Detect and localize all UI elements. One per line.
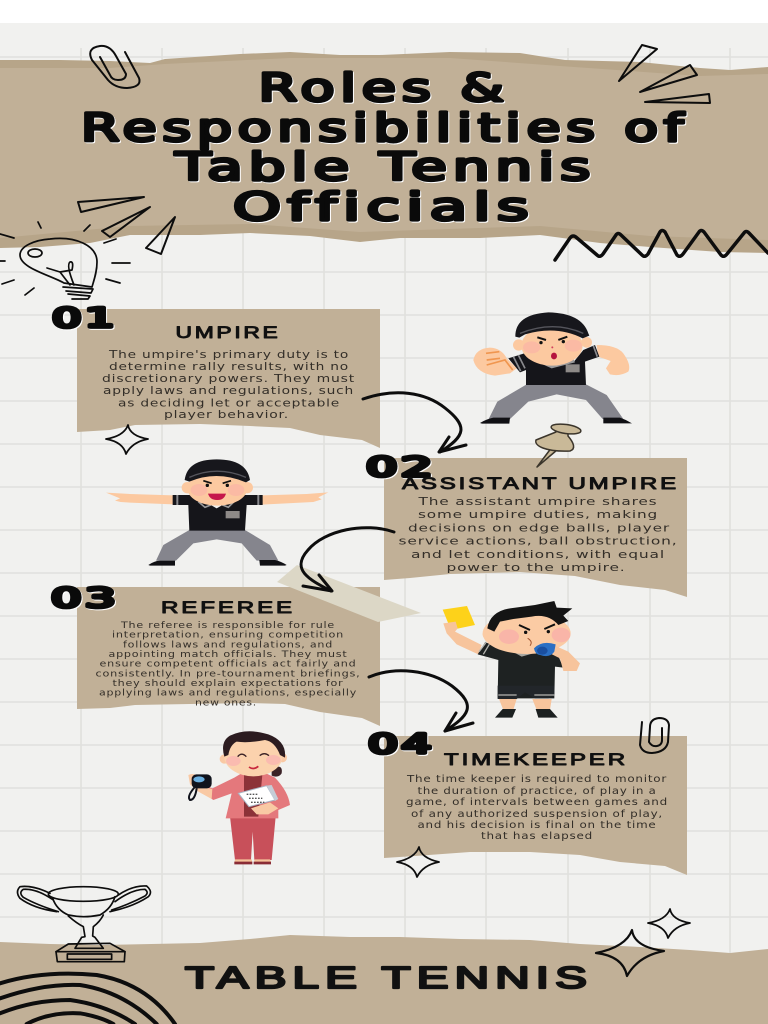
panel: referee [51,583,380,726]
illustration: assistant umpire arms out [106,459,328,566]
timekeeper description: of any authorized suspension of play, [411,809,663,820]
panel: timekeeper [368,729,687,875]
icon: light bulb [0,222,130,299]
referee description: follows laws and regulations, and [123,640,333,650]
icon: spikes top left [78,197,175,254]
title: Roles & [258,66,510,110]
icon: large sparkle [596,930,664,976]
referee description: they should explain expectations for [112,679,344,689]
panel: assistant umpire [366,452,687,597]
tape strip [277,565,421,622]
umpire description: as deciding let or acceptable [118,398,340,410]
umpire description: player behavior. [164,409,289,421]
referee description: interpretation, ensuring competition [112,631,344,641]
icon: push pin [536,422,581,467]
umpire description: apply laws and regulations, such [103,385,354,397]
referee description [96,621,360,708]
arrow: referee to timekeeper [369,671,473,731]
referee description: The referee is responsible for rule [120,621,335,631]
assistant umpire description: and let conditions, with equal [411,548,665,561]
arrow: assistant umpire to referee [301,528,394,591]
timekeeper description: and his decision is final on the time [418,820,656,831]
icon: concentric arcs [0,974,175,1024]
assistant umpire description: decisions on edge balls, player [408,522,670,534]
referee description: appointing match officials. They must [108,650,348,660]
timekeeper description: the duration of practice, of play in a [418,786,656,797]
timekeeper description: that has elapsed [481,831,593,842]
icon: paperclip top [90,46,140,88]
umpire description: discretionary powers. They must [102,373,355,385]
heading: umpire: UMPIRE [176,323,280,342]
number 03: 03 [51,583,119,614]
icon: zigzag line [555,230,768,260]
number 02: 02 [366,452,436,483]
number 04: 04 [368,729,435,760]
assistant umpire description: service actions, ball obstruction, [398,534,678,548]
panel: title banner torn paper [0,52,768,253]
referee description: consistently. In pre-tournament briefings, [96,669,360,679]
icon: sparkle beside timekeeper panel [397,847,439,877]
illustration: umpire pointing fist [473,312,632,424]
assistant umpire description: power to the umpire. [446,561,626,574]
umpire description: The umpire's primary duty is to [108,349,349,361]
title: Officials [233,185,535,229]
illustration: timekeeper with stopwatch and notebook [188,731,290,864]
heading: assistant umpire: ASSISTANT UMPIRE [402,474,679,493]
assistant umpire description: some umpire duties, making [418,508,658,521]
timekeeper description: game, of intervals between games and [406,797,668,808]
icon: paperclip timekeeper [640,718,669,753]
heading: referee: REFEREE [161,598,295,617]
panel: umpire [52,303,380,448]
heading: timekeeper: TIMEKEEPER [444,750,628,769]
number 01: 01 [52,303,118,334]
referee description: ensure competent officials act fairly and [100,660,356,670]
umpire description [102,349,355,421]
title [81,66,689,229]
icon: spikes top right [619,45,710,103]
illustration: referee with yellow card and whistle [443,601,580,718]
icon: small sparkle [648,909,690,938]
referee description: new ones. [195,698,257,708]
arrow: umpire to assistant umpire [363,393,466,452]
umpire description: determine rally results, with no [109,361,349,373]
icon: sparkle under umpire panel [106,425,148,454]
icon: trophy [17,886,150,962]
assistant umpire description: The assistant umpire shares [417,495,658,508]
title: Table Tennis [174,145,596,189]
heading: table tennis: TABLE TENNIS [185,960,593,995]
referee description: applying laws and regulations, especially [99,689,357,699]
title: Responsibilities of [81,106,689,150]
assistant umpire description [398,495,678,574]
panel: bottom torn paper banner [0,935,768,1024]
timekeeper description [406,774,668,842]
timekeeper description: The time keeper is required to monitor [406,774,667,785]
